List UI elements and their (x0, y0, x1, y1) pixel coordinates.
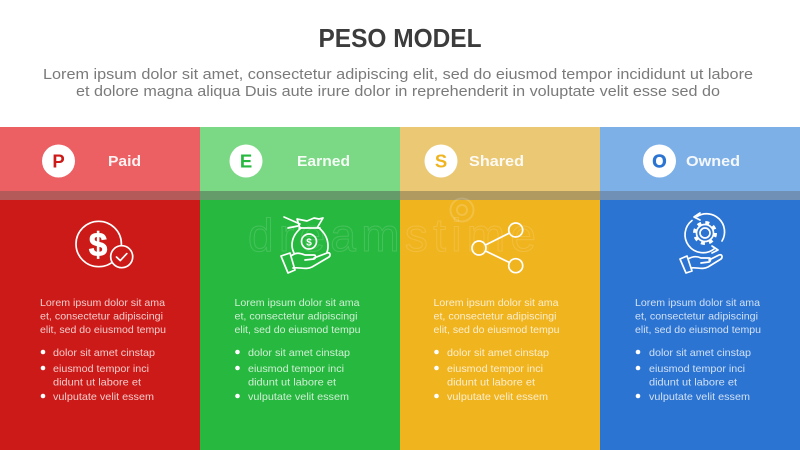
owned badge (643, 144, 676, 178)
owned text block: dolor sit amet cinstap (649, 347, 751, 359)
subtitle text: Lorem ipsum dolor sit amet, consectetur adipiscing elit, sed do eiusmod tempor incididunt ut labore (43, 66, 753, 83)
shared badge (424, 144, 458, 178)
paid heading: Paid (108, 153, 141, 170)
owned text block: eiusmod tempor inci (649, 363, 745, 375)
watermark: dreamstime (248, 209, 536, 261)
paid badge (42, 144, 75, 178)
paid text block: eiusmod tempor inci (53, 363, 149, 375)
shared text block: elit, sed do eiusmod tempu (434, 324, 560, 336)
subtitle text: et dolore magna aliqua Duis aute irure dolor in reprehenderit in voluptate velit esse sed do (76, 83, 720, 100)
owned text block: didunt ut labore et (649, 376, 737, 388)
owned text block: elit, sed do eiusmod tempu (635, 324, 761, 336)
paid text block: dolor sit amet cinstap (53, 347, 155, 359)
earned text block: eiusmod tempor inci (248, 363, 344, 375)
panel: paid (0, 127, 200, 450)
paid text block: vulputate velit essem (53, 391, 154, 403)
owned heading: Owned (686, 153, 740, 170)
paid badge: P (52, 151, 65, 172)
earned text block: dolor sit amet cinstap (248, 347, 350, 359)
owned text block: Lorem ipsum dolor sit ama (635, 297, 760, 309)
earned text block: elit, sed do eiusmod tempu (234, 324, 361, 336)
shared text block: Lorem ipsum dolor sit ama (434, 297, 559, 309)
icon: dollar with check (76, 221, 133, 268)
subtitle text (43, 66, 753, 100)
shared text block: didunt ut labore et (447, 376, 535, 388)
icon: dollar with check: $ (89, 226, 107, 263)
shared text block: eiusmod tempor inci (447, 363, 543, 375)
earned text block: vulputate velit essem (248, 391, 349, 403)
shared text block: dolor sit amet cinstap (447, 347, 549, 359)
owned badge: O (652, 151, 667, 172)
earned badge (230, 144, 262, 178)
paid text block (40, 297, 166, 403)
panel: earned (200, 127, 400, 450)
panel: owned (600, 127, 800, 450)
earned text block: Lorem ipsum dolor sit ama (234, 297, 360, 309)
icon: gear in cycle on hand (680, 213, 725, 273)
icon: share nodes (472, 223, 523, 273)
title: PESO MODEL (318, 23, 482, 53)
owned text block (635, 297, 761, 403)
shared badge: S (435, 151, 447, 172)
earned text block: didunt ut labore et (248, 376, 336, 388)
paid text block: didunt ut labore et (53, 376, 141, 388)
shared text block (434, 297, 560, 403)
paid text block: elit, sed do eiusmod tempu (40, 324, 166, 336)
paid text block: et, consectetur adipiscingi (40, 310, 163, 322)
earned text block (234, 297, 361, 403)
shared text block: et, consectetur adipiscingi (434, 310, 556, 322)
paid text block: Lorem ipsum dolor sit ama (40, 297, 165, 309)
earned text block: et, consectetur adipiscingi (234, 310, 358, 322)
owned text block: et, consectetur adipiscingi (635, 310, 758, 322)
owned text block: vulputate velit essem (649, 391, 750, 403)
panel: shared (400, 127, 600, 450)
earned badge: E (240, 151, 252, 172)
shared text block: vulputate velit essem (447, 391, 548, 403)
icon: money bag on hand (281, 217, 330, 273)
earned heading: Earned (297, 153, 350, 170)
shared heading: Shared (469, 153, 524, 170)
icon: money bag on hand: $ (306, 238, 312, 248)
